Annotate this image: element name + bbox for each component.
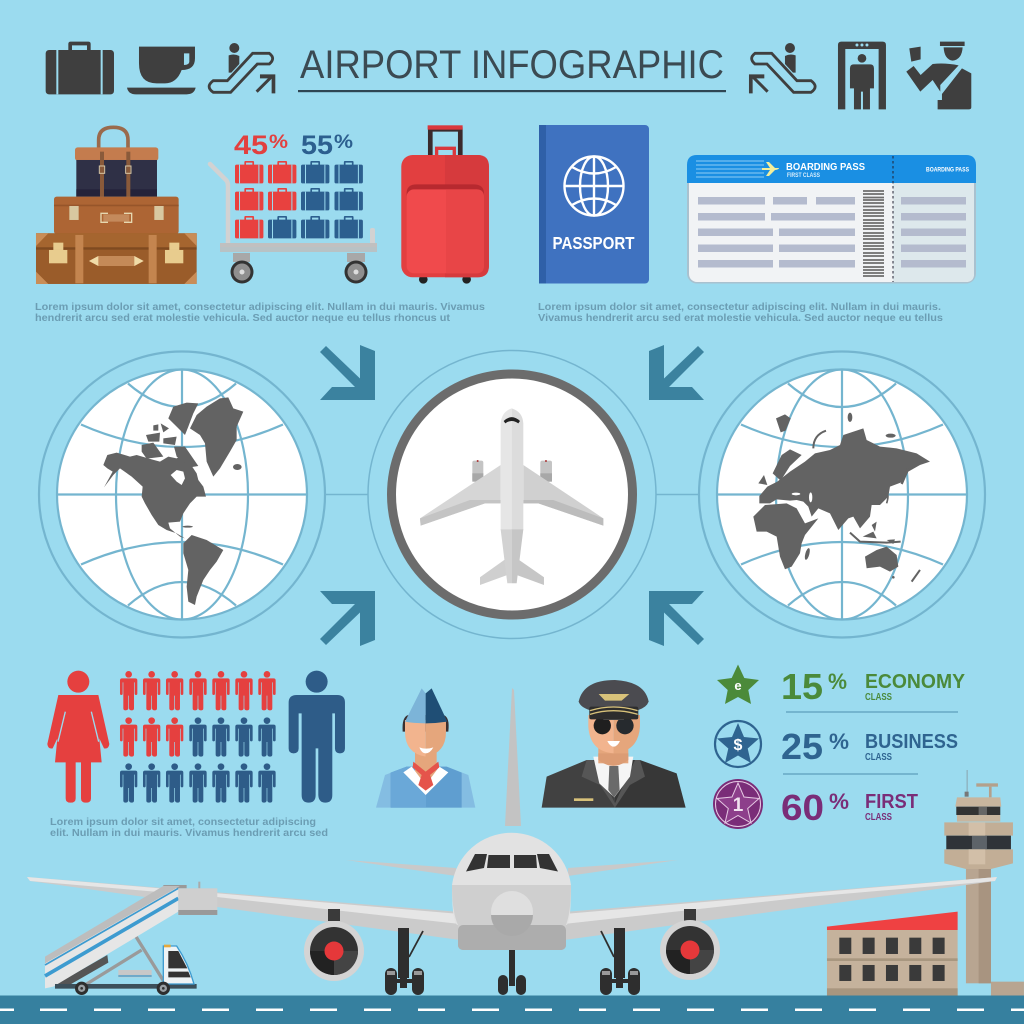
icon: escalator down: [749, 43, 815, 93]
globe icon: [564, 156, 624, 216]
class legend: economy: 15: [781, 666, 823, 707]
illustration: boarding pass: BOARDING PASS: [926, 166, 970, 174]
text block: right: Lorem ipsum dolor sit amet, consectetur adipiscing elit. Nullam in dui mauris.: [538, 301, 941, 313]
title: AIRPORT INFOGRAPHIC: [300, 43, 724, 87]
illustration: stacked suitcases: [36, 127, 197, 284]
percent labels: %: [269, 132, 288, 153]
boarding stairs truck: [45, 882, 217, 995]
airplane top view: [420, 408, 603, 585]
class legend: first: FIRST: [865, 790, 918, 813]
bottom trunk: [36, 233, 197, 284]
connector lines: [325, 494, 699, 496]
right engine: [660, 909, 720, 980]
icon: green star: e: [734, 678, 742, 693]
middle case: [54, 197, 179, 234]
blue small figures: [120, 717, 276, 803]
red bags: [235, 161, 296, 238]
arrow: top right: [649, 345, 704, 400]
icon: man: [289, 671, 345, 803]
barcode: [863, 191, 884, 276]
bag handle: [99, 127, 128, 152]
right landing gear: [600, 928, 640, 995]
class legend: business: [715, 721, 958, 767]
class legend: first: [713, 779, 918, 829]
class legend: economy: CLASS: [865, 691, 892, 703]
class legend: business: CLASS: [865, 751, 892, 763]
airplane front view: [27, 688, 997, 995]
cockpit windows: [466, 854, 558, 872]
left engine: [304, 909, 364, 981]
pilot: [542, 680, 686, 808]
arrow: bottom right: [649, 591, 704, 646]
text block: left: [35, 301, 485, 324]
icon: briefcase: [46, 42, 114, 94]
trolley frame: [210, 164, 377, 284]
icon: green star: [717, 664, 759, 704]
icon: purple badge: 1: [733, 795, 744, 816]
text block: people: elit. Nullam in dui mauris. Vivamus hendrerit arcu sed: [50, 827, 328, 839]
runway: [0, 996, 1024, 1024]
chart: luggage trolley 45% / 55%: [210, 130, 377, 284]
icon: passport officer: [906, 42, 971, 109]
left wing: [27, 877, 460, 940]
class legend: first: 60: [781, 787, 824, 828]
map: Americas: [103, 397, 243, 605]
illustration: boarding pass: BOARDING PASS: [786, 161, 865, 173]
chart: gender pictogram: [47, 671, 345, 803]
stabilizers: [346, 860, 678, 876]
percent labels: 45: [234, 130, 268, 160]
class legend: economy: ECONOMY: [865, 670, 965, 693]
terminal building: [827, 912, 958, 996]
icon: blue star: [715, 721, 761, 767]
right wing: [564, 877, 997, 940]
arrow: bottom left: [320, 591, 375, 646]
form fields: [698, 197, 966, 268]
globe: Eurasia, Africa, Australia: [699, 352, 985, 638]
class legend: first: %: [829, 789, 849, 814]
text block: people: Lorem ipsum dolor sit amet, consectetur adipiscing: [50, 816, 316, 828]
arrow: top left: [320, 345, 375, 400]
illustration: red suitcase: [401, 125, 489, 284]
icon: blue star: $: [734, 737, 743, 754]
percent labels: %: [334, 132, 353, 153]
percent labels: 55: [301, 130, 333, 160]
text block: left: Lorem ipsum dolor sit amet, consectetur adipiscing elit. Nullam in dui mauris. Vivamus: [35, 301, 485, 313]
fuselage: [452, 833, 571, 950]
text block: left: hendrerit arcu sed erat molestie vehicula. Sed auctor neque eu tellus rhoncus ut: [35, 312, 451, 324]
tail fin: [505, 688, 521, 826]
center circle with airplane top view: [368, 350, 656, 638]
windows: [839, 938, 945, 981]
class legend: economy: [717, 664, 965, 707]
icon: escalator up: [209, 43, 275, 93]
icon: small plane: [762, 162, 779, 176]
icon: woman: [47, 671, 109, 803]
illustration: boarding pass: FIRST CLASS: [787, 173, 820, 179]
speed lines: [696, 161, 764, 177]
class legend: economy: %: [828, 669, 847, 694]
percent labels: [234, 130, 353, 160]
text block: people: [50, 816, 328, 839]
icon: security gate: [838, 42, 886, 109]
text block: right: Vivamus hendrerit arcu sed erat molestie vehicula. Sed auctor neque eu tellus: [538, 312, 943, 324]
control tower: [944, 770, 1024, 996]
nose landing gear: [498, 948, 526, 995]
red small figures: [120, 671, 276, 757]
illustration: passport: [539, 125, 649, 284]
class legend: business: %: [829, 729, 849, 754]
top bag: [75, 147, 158, 197]
map: Eurasia, Africa, Australia: [753, 413, 930, 582]
stewardess: [376, 688, 475, 808]
divider: [783, 773, 918, 775]
left landing gear: [385, 928, 424, 995]
globe: Americas: [39, 352, 325, 638]
illustration: boarding pass: [687, 155, 976, 284]
icon: coffee cup: [127, 47, 196, 94]
class legend: business: BUSINESS: [865, 730, 958, 753]
icon: purple badge: [713, 779, 763, 829]
illustration: passport: PASSPORT: [552, 233, 635, 253]
divider: [786, 711, 958, 713]
blue bags: [268, 161, 363, 238]
class legend: first: CLASS: [865, 811, 892, 823]
text block: right: [538, 301, 943, 324]
class legend: business: 25: [781, 726, 823, 767]
